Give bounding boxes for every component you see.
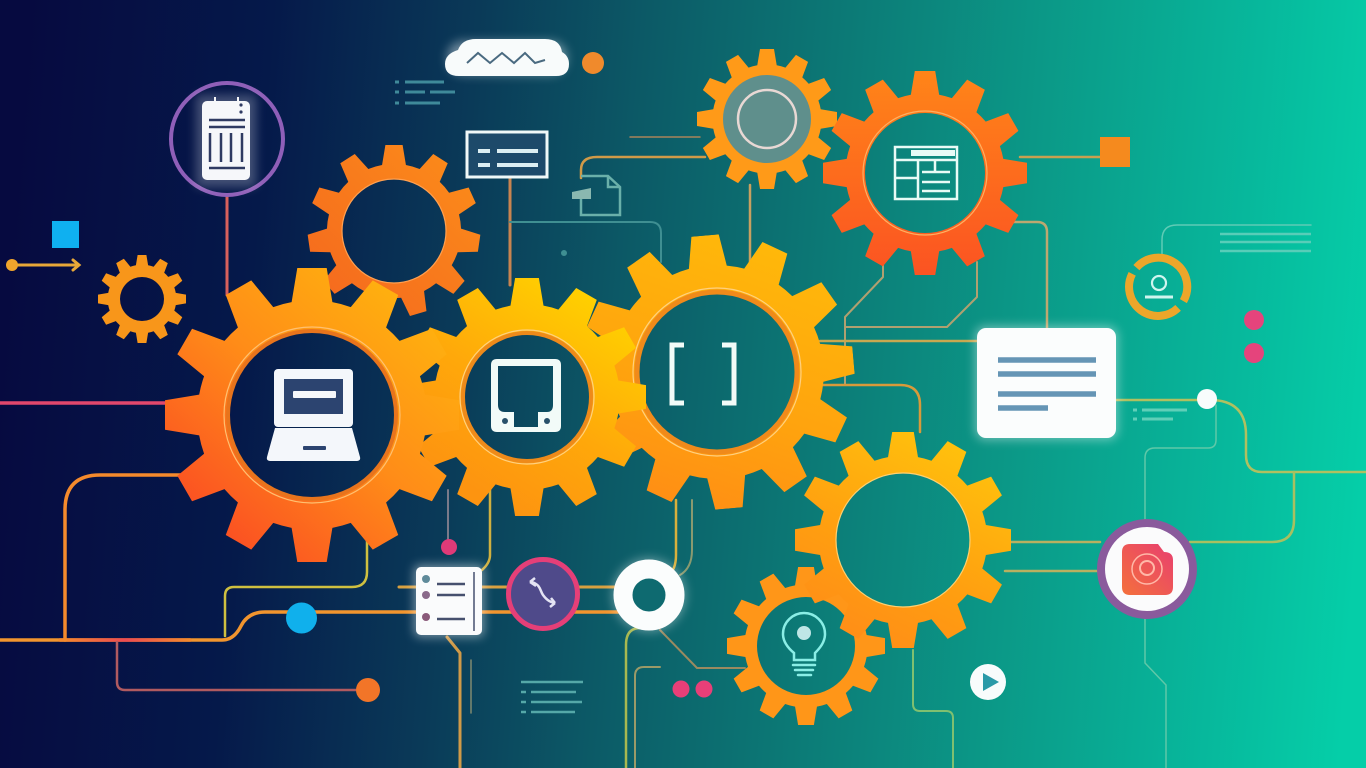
arrow: left yellow bbox=[6, 259, 79, 271]
gear: right centre with brackets bbox=[587, 234, 855, 510]
connector lines: left bbox=[0, 175, 620, 690]
icon: play button bbox=[970, 664, 1006, 700]
text lines: faint right bbox=[1220, 234, 1311, 251]
node: teal dot bbox=[561, 250, 567, 256]
icon: folder outline bbox=[572, 176, 620, 215]
icon: blue square bbox=[52, 221, 79, 248]
dots: pink pair right bbox=[1244, 310, 1264, 363]
node: blue dot bbox=[286, 602, 317, 634]
icon: laptop bbox=[267, 369, 360, 461]
node: white dot bbox=[1197, 389, 1217, 409]
icon: brackets bbox=[672, 345, 734, 403]
panel: white text card bbox=[975, 326, 1118, 440]
gear: top centre bbox=[696, 48, 838, 190]
icon: camera badge bbox=[1097, 519, 1197, 619]
icon: window layout bbox=[895, 147, 957, 199]
icon: route badge bbox=[508, 560, 578, 628]
node: orange dot bbox=[356, 678, 380, 702]
gear: middle with socket icon bbox=[407, 277, 647, 517]
text lines: faint bottom bbox=[521, 682, 583, 712]
icon: socket bbox=[491, 359, 561, 432]
icon: cloud bbox=[445, 39, 569, 76]
gear: small orange left bbox=[98, 255, 186, 343]
icon: document card bbox=[467, 132, 547, 177]
icon: calendar badge bbox=[171, 83, 283, 195]
icon: checklist card bbox=[414, 565, 484, 637]
gear: upper left ring bbox=[307, 144, 481, 318]
icon: orange square bbox=[1100, 137, 1130, 167]
icon: white ring bbox=[612, 558, 686, 632]
dot: orange near cloud bbox=[582, 52, 604, 74]
connector lines: right bbox=[810, 157, 1366, 768]
gear: bulb bbox=[726, 566, 886, 726]
connector lines: centre bbox=[447, 137, 750, 768]
gear: top right with window icon bbox=[822, 70, 1028, 276]
text lines: faint top bbox=[395, 82, 455, 103]
gear: lower right ring bbox=[794, 431, 1012, 649]
icon: user ring bbox=[1129, 258, 1187, 316]
dots: pink pair bottom bbox=[672, 680, 712, 698]
icon: light bulb bbox=[783, 613, 825, 675]
text lines: small beside card bbox=[1133, 410, 1187, 419]
gear: large laptop gear bbox=[164, 267, 460, 563]
node: pink dot bbox=[441, 539, 457, 555]
